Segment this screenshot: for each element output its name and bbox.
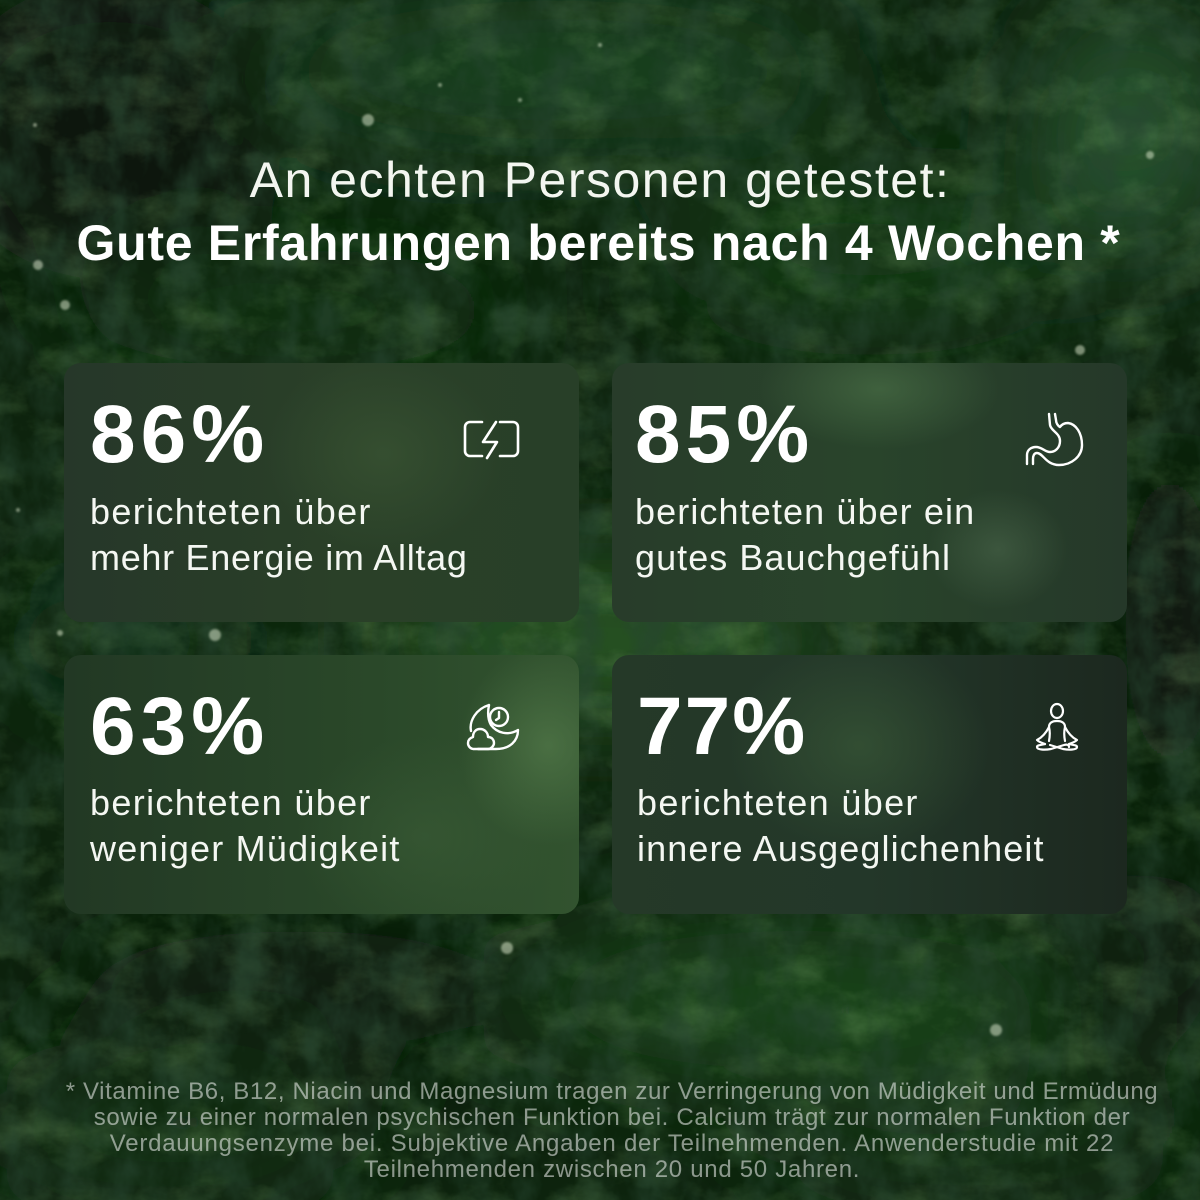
text: energy: mehr Energie im Alltag <box>90 537 468 578</box>
stat: 85%: 85% <box>635 389 814 480</box>
panel: 63% tiredness <box>64 655 579 914</box>
title: Gute Erfahrungen bereits nach 4 Wochen * <box>77 215 1120 271</box>
text: energy <box>90 491 468 578</box>
title: An echten Personen getestet: <box>250 152 950 208</box>
text: tiredness: berichteten über <box>90 782 372 823</box>
text: gut feeling: berichteten über ein <box>635 491 975 532</box>
text: tiredness: weniger Müdigkeit <box>90 828 401 869</box>
stat: 86%: 86% <box>90 389 269 480</box>
text: tiredness <box>90 782 401 869</box>
icon: meditating person <box>1036 702 1078 751</box>
stat: 77%: 77% <box>637 681 807 772</box>
panel: 86% energy <box>64 363 579 622</box>
title <box>77 152 1120 271</box>
text: gut feeling <box>635 491 975 578</box>
stat: 63%: 63% <box>90 681 269 772</box>
text: balance <box>637 782 1045 869</box>
text: gut feeling: gutes Bauchgefühl <box>635 537 951 578</box>
icon: battery with lightning <box>464 420 520 460</box>
icon: stomach <box>1026 412 1084 466</box>
text: energy: berichteten über <box>90 491 372 532</box>
footnote: * Vitamine B6, B12, Niacin und Magnesium tragen zur Verringerung von Müdigkeit und Ermüdung <box>66 1078 1158 1105</box>
text: balance: berichteten über <box>637 782 919 823</box>
text: balance: innere Ausgeglichenheit <box>637 828 1045 869</box>
icon: moon with clock and cloud <box>466 704 520 750</box>
panel: 85% gut feeling <box>612 363 1127 622</box>
panel: 77% balance <box>612 655 1127 914</box>
footnote: sowie zu einer normalen psychischen Funktion bei. Calcium trägt zur normalen Funktion der <box>94 1104 1130 1131</box>
footnote <box>66 1078 1158 1183</box>
footnote: Verdauungsenzyme bei. Subjektive Angaben der Teilnehmenden. Anwenderstudie mit 22 <box>110 1130 1114 1157</box>
footnote: Teilnehmenden zwischen 20 und 50 Jahren. <box>364 1156 860 1183</box>
